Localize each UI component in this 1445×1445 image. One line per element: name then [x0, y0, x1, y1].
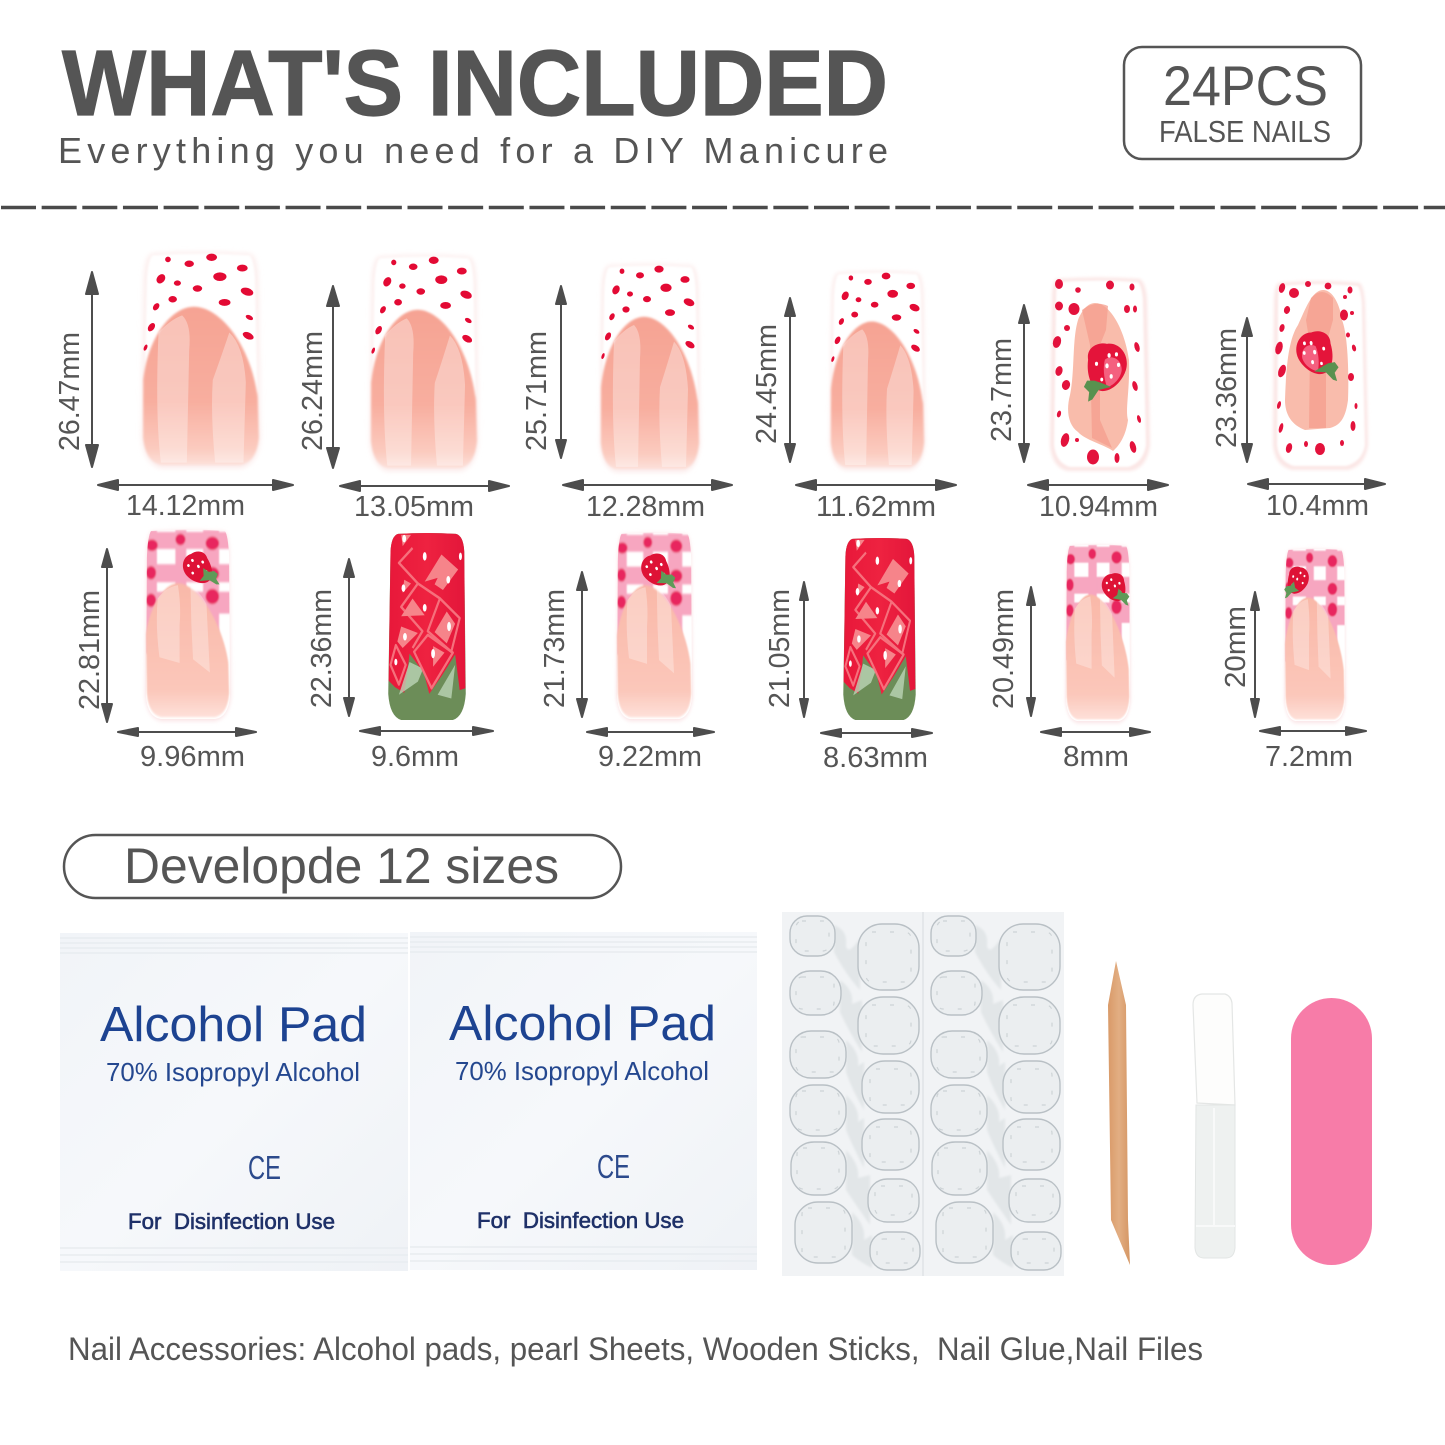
- nail 1: polka french with dimensions: 26.47mm: [54, 332, 86, 451]
- nail 2: polka french with dimensions: 26.24mm: [297, 331, 329, 451]
- nail 11: gingham french with dimensions: 8mm: [1063, 741, 1129, 773]
- nail 4: polka french with dimensions: 24.45mm: [751, 324, 783, 444]
- nail 3: polka french with dimensions: [521, 264, 732, 523]
- pearl sticker sheet: [782, 912, 1064, 1276]
- badge: 24PCS false nails: FALSE NAILS: [1159, 114, 1331, 149]
- nail 9: gingham french with dimensions: [539, 533, 714, 773]
- nail 12: gingham french with dimensions: 20mm: [1220, 606, 1252, 688]
- nail 7: gingham french with dimensions: 22.81mm: [74, 590, 106, 710]
- nail 7: gingham french with dimensions: [74, 530, 256, 773]
- nail 5: strawberry dotted nail with dimensions: [986, 278, 1168, 523]
- alcohol pad right: Alcohol Pad: [449, 997, 716, 1051]
- nail 7: gingham french with dimensions: 9.96mm: [140, 741, 245, 773]
- nail 3: polka french with dimensions: 25.71mm: [521, 331, 553, 451]
- alcohol pad right: CE: [597, 1148, 630, 1185]
- nail 3: polka french with dimensions: 12.28mm: [586, 491, 705, 523]
- nail 9: gingham french with dimensions: 9.22mm: [598, 741, 702, 773]
- nail 1: polka french with dimensions: [54, 252, 293, 522]
- nail glue bottle: [1193, 994, 1235, 1258]
- nail 10: strawberry red nail with dimensions: [764, 538, 932, 774]
- title: WHAT'S INCLUDED: [62, 31, 888, 135]
- nail 12: gingham french with dimensions: 7.2mm: [1265, 741, 1353, 773]
- nail 1: polka french with dimensions: 14.12mm: [126, 490, 245, 522]
- nail 12: gingham french with dimensions: [1220, 549, 1366, 773]
- nail 11: gingham french with dimensions: 20.49mm: [988, 589, 1020, 709]
- nail 11: gingham french with dimensions: [988, 545, 1150, 773]
- wooden stick: [1108, 961, 1130, 1265]
- alcohol pad right: [410, 932, 757, 1270]
- nail 8: strawberry red nail with dimensions: 9.6mm: [371, 741, 459, 773]
- badge: 24PCS false nails: [1124, 47, 1361, 159]
- nail 2: polka french with dimensions: 13.05mm: [354, 491, 474, 523]
- nail 5: strawberry dotted nail with dimensions: 10.94mm: [1039, 491, 1158, 523]
- alcohol pad left: 70% Isopropyl Alcohol: [106, 1057, 360, 1087]
- alcohol pad left: [60, 933, 408, 1271]
- alcohol pad left: For Disinfection Use: [128, 1209, 335, 1234]
- sizes pill: Developde 12 sizes: [124, 838, 559, 894]
- nail 9: gingham french with dimensions: 21.73mm: [539, 589, 571, 708]
- nail 10: strawberry red nail with dimensions: 21.05mm: [764, 589, 796, 708]
- nail 6: strawberry dotted nail with dimensions: 10.4mm: [1266, 490, 1369, 522]
- nail 4: polka french with dimensions: 11.62mm: [816, 491, 936, 523]
- badge: 24PCS false nails: 24PCS: [1163, 54, 1328, 117]
- nail 8: strawberry red nail with dimensions: 22.36mm: [306, 589, 338, 708]
- subtitle: Everything you need for a DIY Manicure: [58, 130, 888, 171]
- alcohol pad right: For Disinfection Use: [477, 1208, 684, 1233]
- nail 8: strawberry red nail with dimensions: [306, 533, 493, 773]
- nail 4: polka french with dimensions: [751, 272, 956, 523]
- pink nail file: [1291, 998, 1372, 1265]
- sizes pill: [64, 835, 621, 898]
- alcohol pad left: CE: [248, 1149, 281, 1186]
- nail 6: strawberry dotted nail with dimensions: 23.36mm: [1211, 328, 1243, 448]
- alcohol pad right: 70% Isopropyl Alcohol: [455, 1056, 709, 1086]
- accessories caption: Nail Accessories: Alcohol pads, pearl Sheets, Wooden Sticks, Nail Glue,Nail Files: [68, 1331, 1203, 1367]
- nail 5: strawberry dotted nail with dimensions: 23.7mm: [986, 338, 1018, 442]
- nail 6: strawberry dotted nail with dimensions: [1211, 281, 1385, 522]
- alcohol pad left: Alcohol Pad: [100, 998, 367, 1052]
- nail 10: strawberry red nail with dimensions: 8.63mm: [823, 742, 928, 774]
- nail 2: polka french with dimensions: [297, 255, 509, 523]
